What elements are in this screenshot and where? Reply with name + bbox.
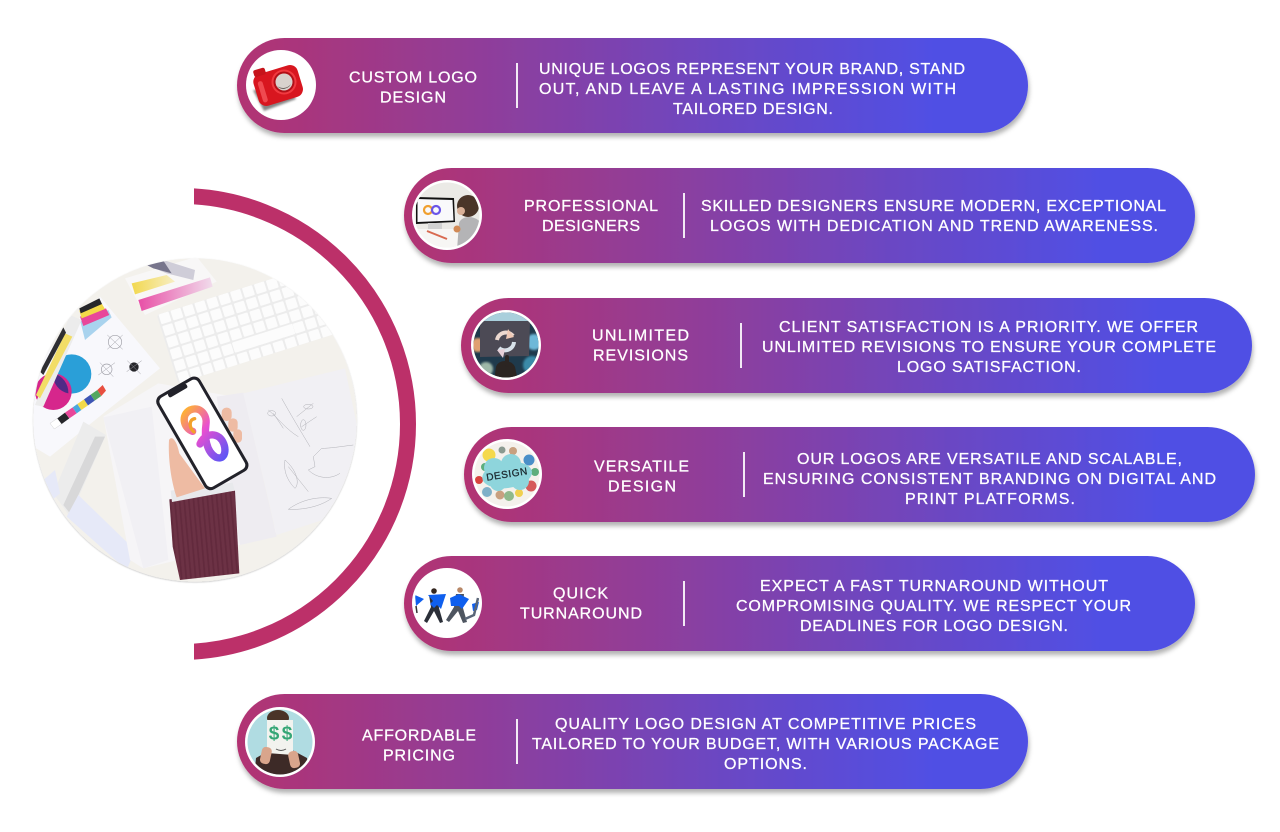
central photo: hand holding phone with logo on designer desk xyxy=(32,258,358,583)
label: custom logo design: DESIGN xyxy=(380,90,446,106)
blank notebook xyxy=(103,383,277,568)
description: versatile design: OUR LOGOS ARE VERSATILE AND SCALABLE, xyxy=(797,451,1182,468)
decorative ring arc xyxy=(194,188,416,660)
description: versatile design xyxy=(763,451,1216,508)
label: professional designers: DESIGNERS xyxy=(542,218,640,235)
description: quick turnaround xyxy=(736,578,1131,635)
icon: man holding paper with dollar eyes: $ xyxy=(269,724,280,744)
description: professional designers: SKILLED DESIGNERS ENSURE MODERN, EXCEPTIONAL xyxy=(701,198,1166,215)
description: versatile design: PRINT PLATFORMS. xyxy=(905,491,1075,508)
description: affordable pricing: TAILORED TO YOUR BUDGET, WITH VARIOUS PACKAGE xyxy=(532,736,999,753)
label: professional designers: PROFESSIONAL xyxy=(524,198,658,215)
colour wheel sheet xyxy=(33,297,160,457)
label: versatile design: DESIGN xyxy=(608,478,676,496)
description: quick turnaround: EXPECT A FAST TURNAROUND WITHOUT xyxy=(760,578,1108,595)
label: versatile design: VERSATILE xyxy=(594,458,689,476)
label: affordable pricing: AFFORDABLE xyxy=(362,728,476,744)
description: affordable pricing: QUALITY LOGO DESIGN AT COMPETITIVE PRICES xyxy=(555,716,976,733)
shirt cuff xyxy=(171,483,235,502)
phone xyxy=(154,374,251,493)
description: unlimited revisions xyxy=(762,319,1216,376)
description: affordable pricing xyxy=(532,716,999,773)
label: quick turnaround xyxy=(520,586,642,622)
description: versatile design: ENSURING CONSISTENT BRANDING ON DIGITAL AND xyxy=(763,471,1216,488)
label: unlimited revisions: REVISIONS xyxy=(593,348,688,364)
benefit pill: professional designers xyxy=(404,168,1195,263)
label: custom logo design xyxy=(349,70,477,106)
icon: design doodle cloud: DESIGN xyxy=(486,466,529,484)
label: quick turnaround: TURNAROUND xyxy=(520,606,642,622)
swatch bottom-left xyxy=(67,495,130,567)
icon: design doodle cloud xyxy=(474,442,540,506)
benefit pill: quick turnaround xyxy=(404,556,1195,651)
icon: paper with refresh arrows xyxy=(474,312,538,378)
icon: red camera xyxy=(250,58,305,111)
description: custom logo design: OUT, AND LEAVE A LASTING IMPRESSION WITH xyxy=(539,81,956,98)
benefit pill: custom logo design xyxy=(237,38,1028,133)
description: custom logo design: TAILORED DESIGN. xyxy=(673,101,833,118)
description: custom logo design xyxy=(539,61,965,118)
icon: businessmen carrying blue arrows xyxy=(415,587,480,623)
keyboard xyxy=(158,278,332,382)
description: quick turnaround: DEADLINES FOR LOGO DESIGN. xyxy=(800,618,1068,635)
description: custom logo design: UNIQUE LOGOS REPRESENT YOUR BRAND, STAND xyxy=(539,61,965,78)
icon: designer at monitor xyxy=(414,182,480,248)
description: professional designers xyxy=(701,198,1166,235)
colour swatch sheet xyxy=(125,257,217,315)
description: professional designers: LOGOS WITH DEDICATION AND TREND AWARENESS. xyxy=(710,218,1158,235)
icon: man holding paper with dollar eyes: $ xyxy=(282,724,293,744)
label: unlimited revisions: UNLIMITED xyxy=(592,328,689,344)
description: quick turnaround: COMPROMISING QUALITY. WE RESPECT YOUR xyxy=(736,598,1131,615)
description: affordable pricing: OPTIONS. xyxy=(724,756,807,773)
benefit pill: affordable pricing xyxy=(237,694,1028,789)
ruler xyxy=(78,422,89,434)
marker pen xyxy=(35,315,82,407)
sketch notebook xyxy=(217,396,356,544)
label: affordable pricing: PRICING xyxy=(383,748,455,764)
benefit pill: versatile design xyxy=(464,427,1255,522)
label: quick turnaround: QUICK xyxy=(553,586,608,602)
hand xyxy=(169,438,205,497)
description: unlimited revisions: LOGO SATISFACTION. xyxy=(897,359,1081,376)
benefit pill: unlimited revisions xyxy=(461,298,1252,393)
sleeve xyxy=(169,491,239,580)
description: unlimited revisions: CLIENT SATISFACTION IS A PRIORITY. WE OFFER xyxy=(779,319,1198,336)
colour strip xyxy=(50,385,106,429)
label: affordable pricing xyxy=(362,728,476,764)
label: custom logo design: CUSTOM LOGO xyxy=(349,70,477,86)
label: professional designers xyxy=(524,198,658,235)
label: unlimited revisions xyxy=(592,328,689,364)
description: unlimited revisions: UNLIMITED REVISIONS TO ENSURE YOUR COMPLETE xyxy=(762,339,1216,356)
infinity logo on phone xyxy=(184,409,225,458)
fingers xyxy=(222,408,242,443)
icon: man holding paper with dollar eyes xyxy=(248,710,312,774)
label: versatile design xyxy=(594,458,689,496)
